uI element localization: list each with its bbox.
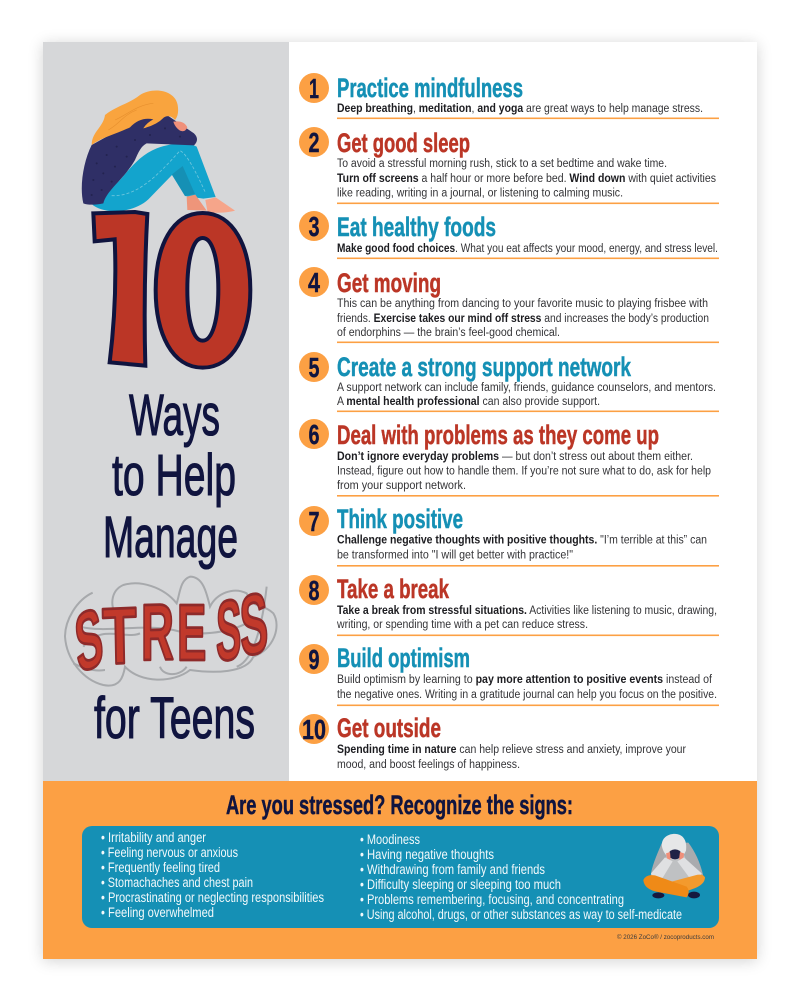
tip 4 — [299, 267, 719, 343]
word: STRESS: R — [141, 587, 174, 677]
list: signs column 1 — [101, 830, 324, 920]
title: for Teens: for Teens — [94, 686, 255, 751]
tip 3: 3 — [308, 211, 320, 242]
tip 2: 2 — [308, 127, 320, 158]
word: STRESS: S — [216, 581, 241, 679]
scribble behind the word stress — [65, 577, 277, 686]
tip 10: Spending time in nature can help relieve stress and anxiety, improve your — [337, 744, 686, 756]
tip 5: A mental health professional can also provide support. — [337, 396, 600, 408]
list: signs column 2: • Using alcohol, drugs, or other substances as way to self-medicate — [360, 907, 682, 922]
tip 8: Take a break — [337, 574, 450, 604]
tip 4: friends. Exercise takes our mind off stress and increases the body’s production — [337, 313, 709, 325]
illustration: sad girl sitting on the number 10 — [82, 91, 250, 368]
tip 9: the negative ones. Writing in a gratitude journal can help you focus on the positive. — [337, 689, 717, 701]
left panel: title — [43, 42, 289, 781]
tip 1 — [299, 73, 719, 119]
tip 1: 1 — [309, 73, 319, 104]
tip 5: A support network can include family, friends, guidance counselors, and mentors. — [337, 382, 716, 394]
tip 8: writing, or spending time with a pet can reduce stress. — [336, 619, 588, 631]
tip 10: mood, and boost feelings of happiness. — [337, 759, 520, 771]
tip 5 — [299, 352, 719, 412]
tip 2 — [299, 127, 719, 204]
tip 2: like reading, writing in a journal, or listening to calming music. — [337, 188, 623, 200]
tip 6 — [299, 419, 719, 497]
tip 3 — [299, 211, 719, 259]
tip 6: Instead, figure out how to handle them. If you’re not sure what to do, ask for help — [337, 466, 711, 478]
tip 10 — [299, 713, 686, 771]
tip 8: Take a break from stressful situations. Activities like listening to music, drawing, — [337, 605, 717, 617]
tip 7: 7 — [308, 506, 320, 537]
tip 10: 10 — [302, 714, 326, 745]
tip 7: be transformed into "I will get better with practice!" — [337, 550, 573, 562]
list: signs column 1: • Irritability and anger — [101, 830, 206, 845]
word: STRESS — [71, 575, 270, 690]
list: signs column 1: • Procrastinating or neglecting responsibilities — [101, 890, 324, 905]
word: STRESS: E — [177, 588, 206, 677]
tip 9: Build optimism by learning to pay more attention to positive events instead of — [337, 674, 713, 686]
tip 4: This can be anything from dancing to your favorite music to playing frisbee with — [337, 298, 708, 310]
title: Ways to Help Manage: Ways — [129, 383, 220, 448]
word: STRESS: T — [102, 590, 138, 681]
tip 6: Don’t ignore everyday problems — but don’t stress out about them either. — [337, 451, 693, 463]
number 10 — [93, 212, 250, 368]
list: signs column 2: • Difficulty sleeping or sleeping too much — [360, 877, 561, 892]
tip 8: 8 — [308, 575, 320, 606]
title: Ways to Help Manage: Manage — [103, 505, 238, 570]
list: signs column 1: • Stomachaches and chest pain — [101, 875, 253, 890]
tip 2: Get good sleep — [337, 128, 470, 158]
word: STRESS: S — [71, 589, 106, 690]
title: Ways to Help Manage — [103, 383, 238, 570]
tip 2: To avoid a stressful morning rush, stick to a set bedtime and wake time. — [337, 158, 667, 170]
word: STRESS: S — [238, 575, 270, 675]
list: signs column 2: • Moodiness — [360, 832, 420, 847]
tip 6: Deal with problems as they come up — [337, 420, 659, 450]
tip 4: Get moving — [337, 268, 441, 298]
tip 3: Make good food choices. What you eat affects your mood, energy, and stress level. — [337, 243, 718, 255]
title: Ways to Help Manage: to Help — [112, 443, 236, 508]
tip 4: 4 — [308, 267, 320, 298]
tip 5: Create a strong support network — [337, 352, 632, 382]
tip 7: Challenge negative thoughts with positive thoughts. "I’m terrible at this” can — [337, 534, 707, 546]
tip 1: Practice mindfulness — [337, 73, 523, 103]
tip 1: Deep breathing, meditation, and yoga are great ways to help manage stress. — [337, 103, 703, 115]
icon: hooded teen sitting cross-legged — [643, 834, 705, 898]
tip 6: 6 — [308, 419, 320, 450]
tip 7: Think positive — [337, 504, 463, 534]
tip 5: 5 — [308, 352, 320, 383]
list: signs column 2: • Having negative thoughts — [360, 847, 494, 862]
panel: recognize the signs — [43, 781, 757, 959]
copyright: © 2026 ZoCo® / zocoproducts.com — [617, 933, 714, 941]
tip 4: of endorphins — the brain’s feel-good chemical. — [337, 327, 560, 339]
tip 9: Build optimism — [337, 643, 470, 673]
tip 3: Eat healthy foods — [337, 212, 496, 242]
tip 10: Get outside — [337, 713, 441, 743]
list: signs column 1: • Frequently feeling tired — [101, 860, 220, 875]
list: signs column 1: • Feeling overwhelmed — [101, 905, 214, 920]
list: signs column 2 — [360, 832, 682, 922]
tip 9: 9 — [308, 644, 320, 675]
list: signs column 2: • Problems remembering, focusing, and concentrating — [360, 892, 624, 907]
tip 6: from your support network. — [337, 480, 466, 492]
list: signs column 2: • Withdrawing from family and friends — [360, 862, 545, 877]
tip 8 — [299, 574, 719, 636]
heading: are you stressed: Are you stressed? Recognize the signs: — [226, 790, 573, 820]
tip 2: Turn off screens a half hour or more before bed. Wind down with quiet activities — [337, 173, 716, 185]
tip 9 — [299, 643, 719, 706]
blue signs box — [82, 826, 719, 928]
list: signs column 1: • Feeling nervous or anxious — [101, 845, 238, 860]
tip 7 — [299, 504, 719, 567]
